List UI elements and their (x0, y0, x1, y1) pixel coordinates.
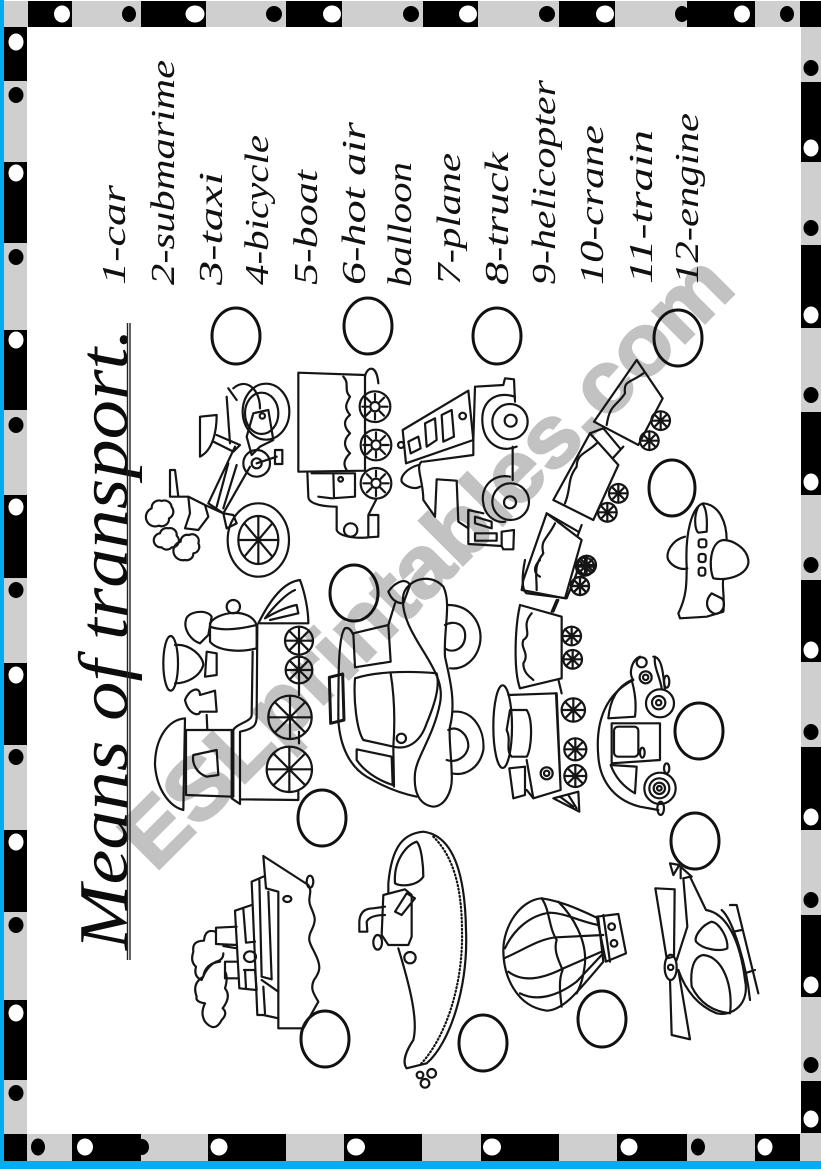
vehicle: hot air balloon (503, 898, 626, 1011)
title: Means of transport. (66, 328, 143, 951)
vehicle: small car (598, 657, 676, 815)
numbered word list: 9-helicopter (526, 79, 563, 285)
answer circles (212, 298, 723, 1071)
vehicle: train carriages (516, 558, 594, 693)
numbered word list: 10-crane (574, 125, 611, 285)
vehicle: helicopter (655, 863, 758, 1039)
numbered word list: 4-bicycle (239, 135, 276, 285)
numbered word list: 1-car (96, 184, 133, 285)
vehicle: truck (298, 369, 391, 538)
numbered word list: 7-plane (431, 153, 468, 285)
vehicle: small train engine (493, 685, 586, 812)
vehicle: bicycle (146, 384, 289, 577)
numbered word list (96, 60, 706, 287)
vehicle: submarine (359, 832, 466, 1088)
numbered word list: 3-taxi (193, 172, 230, 286)
vehicle: crane (398, 378, 529, 549)
vehicle: steam engine (155, 580, 313, 810)
numbered word list: balloon (382, 162, 419, 287)
numbered word list: 8-truck (479, 151, 516, 285)
vehicle: plane (667, 503, 748, 618)
numbered word list: 5-boat (288, 168, 325, 285)
numbered word list: 6-hot air (336, 121, 373, 285)
watermark: ESLprintables.com (101, 236, 751, 886)
numbered word list: 12-engine (669, 113, 706, 284)
vehicle: taxi (329, 579, 483, 807)
vehicle: boat (192, 856, 319, 1028)
numbered word list: 11-train (623, 130, 660, 284)
title underline (128, 323, 130, 960)
numbered word list: 2-submarime (145, 60, 182, 285)
